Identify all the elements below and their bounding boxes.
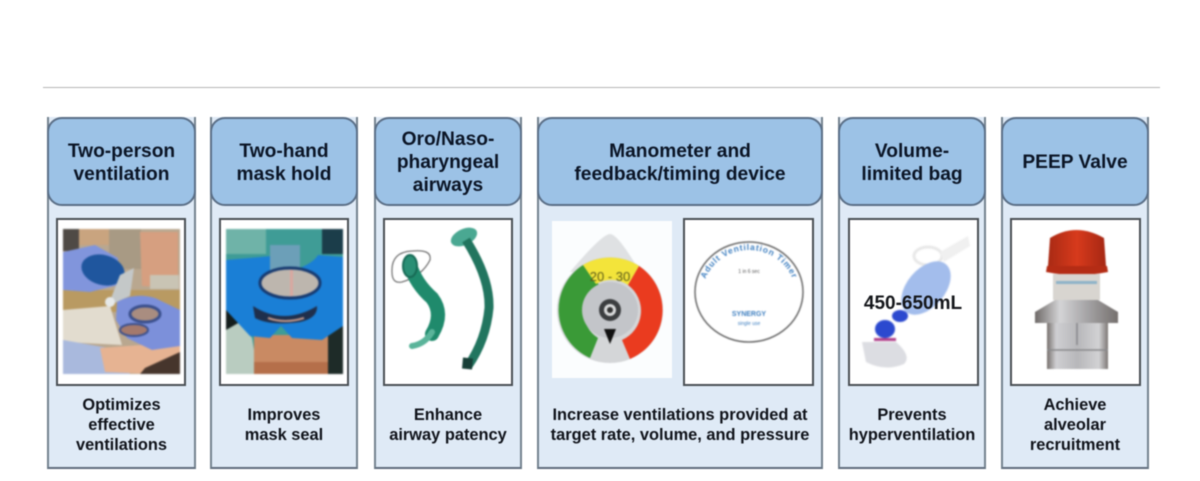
image: resuscitation bag with volume label: 450-650mL — [863, 292, 962, 314]
heading: oro/naso-pharyngeal airways: airways — [413, 175, 483, 196]
image: pressure manometer dial: 20 - 30 — [590, 269, 630, 284]
caption: prevents hyperventilation: Prevents — [877, 406, 947, 424]
image: ventilation timer disc: 1 in 6 sec — [738, 268, 760, 274]
heading: two-hand mask hold: Two-hand — [239, 141, 329, 162]
panel: oro/naso-pharyngeal airways — [374, 117, 522, 469]
image: oropharyngeal and nasopharyngeal airways — [383, 218, 513, 386]
photo: two hands holding a mask — [219, 218, 349, 386]
caption: achieve alveolar recruitment: recruitment — [1030, 436, 1120, 454]
caption: enhance airway patency — [389, 406, 508, 444]
heading: two-hand mask hold — [210, 117, 358, 206]
heading: oro/naso-pharyngeal airways: Oro/Naso- — [402, 129, 494, 150]
heading: manometer and feedback/timing device — [537, 117, 823, 206]
heading: oro/naso-pharyngeal airways — [374, 117, 522, 206]
image: resuscitation bag with volume label — [848, 218, 979, 386]
caption: enhance airway patency: airway patency — [389, 426, 507, 444]
heading: oro/naso-pharyngeal airways: pharyngeal — [397, 152, 499, 173]
caption: improves mask seal: mask seal — [245, 426, 323, 444]
caption: increase ventilations at target rate, volume, pressure: target rate, volume, and pressure — [551, 426, 809, 444]
heading: two-person ventilation: Two-person — [68, 141, 175, 162]
caption: enhance airway patency: Enhance — [414, 406, 482, 424]
caption: improves mask seal: Improves — [248, 406, 320, 424]
caption: optimizes effective ventilations — [76, 396, 168, 454]
image: ventilation timer disc: SYNERGY — [731, 310, 766, 318]
heading: two-hand mask hold: mask hold — [237, 164, 331, 185]
caption: increase ventilations at target rate, volume, pressure — [550, 406, 810, 444]
caption: achieve alveolar recruitment — [1030, 396, 1121, 454]
panel: two-hand mask hold — [210, 117, 358, 469]
caption: prevents hyperventilation — [849, 406, 976, 444]
caption: optimizes effective ventilations: ventilations — [76, 436, 167, 454]
image: pressure manometer dial — [552, 221, 672, 378]
panel: volume-limited bag — [838, 117, 986, 469]
caption: achieve alveolar recruitment: Achieve — [1044, 396, 1106, 414]
caption: optimizes effective ventilations: Optimizes — [82, 396, 161, 414]
caption: prevents hyperventilation: hyperventilation — [849, 426, 975, 444]
image: ventilation timer disc — [683, 218, 814, 386]
heading: volume-limited bag: Volume- — [875, 141, 949, 162]
caption: improves mask seal — [245, 406, 323, 444]
panel: PEEP valve — [1001, 117, 1149, 469]
caption: achieve alveolar recruitment: alveolar — [1044, 416, 1106, 434]
panel: manometer and feedback/timing device — [537, 117, 823, 469]
image: PEEP valve device — [1010, 218, 1141, 386]
heading: manometer and feedback/timing device: feedback/timing device — [574, 164, 786, 185]
heading: volume-limited bag: limited bag — [861, 164, 963, 185]
caption: increase ventilations at target rate, volume, pressure: Increase ventilations provided at — [552, 406, 808, 424]
heading: manometer and feedback/timing device: Manometer and — [609, 141, 751, 162]
photo: two people ventilating a patient — [56, 218, 186, 386]
image: ventilation timer disc: Adult Ventilation Timer — [700, 243, 798, 280]
image: ventilation timer disc: single use — [737, 320, 760, 326]
heading: two-person ventilation: ventilation — [74, 164, 169, 185]
caption: optimizes effective ventilations: effective — [88, 416, 155, 434]
heading: two-person ventilation — [47, 117, 196, 206]
heading: volume-limited bag — [838, 117, 986, 206]
panel: two-person ventilation — [47, 117, 196, 469]
top divider rule — [43, 87, 1160, 88]
heading: PEEP valve — [1001, 117, 1149, 206]
heading: PEEP valve: PEEP Valve — [1022, 152, 1128, 173]
